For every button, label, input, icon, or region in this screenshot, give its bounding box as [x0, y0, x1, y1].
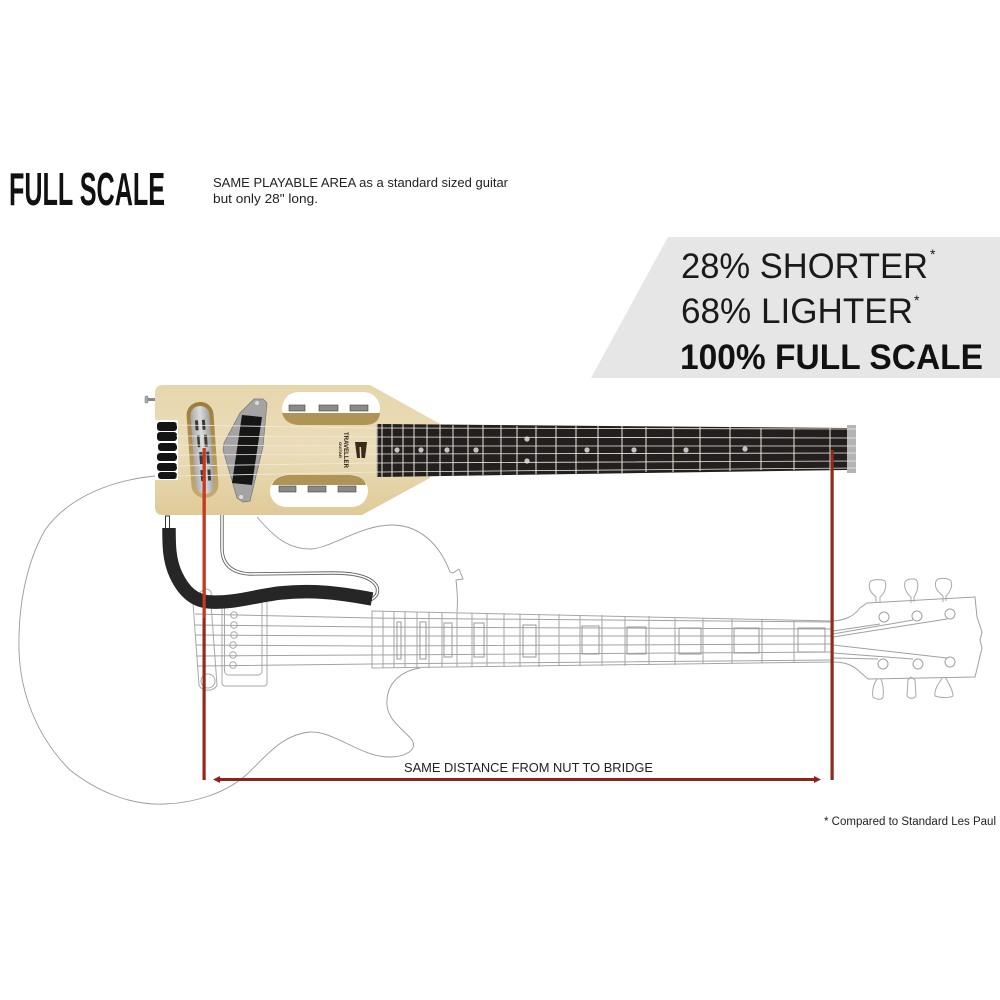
- stat: 68% lighter: 68% LIGHTER: [681, 292, 913, 331]
- tuner knobs: [869, 578, 953, 699]
- headstock: [833, 597, 982, 679]
- logo: [338, 432, 367, 468]
- lower tuner cutout: [270, 475, 368, 507]
- standard guitar outline: [19, 476, 982, 804]
- stat: 28% shorter: 28% SHORTER: [681, 247, 928, 286]
- nut: [847, 425, 856, 473]
- body outline: [19, 476, 463, 804]
- stat: 100% full scale: 100% FULL SCALE: [680, 338, 983, 377]
- fretboard: [372, 611, 832, 668]
- humbucker pickup: [222, 600, 267, 686]
- wire rest: [222, 515, 378, 600]
- subtitle text block: but only 28" long.: [213, 192, 318, 206]
- distance label: SAME DISTANCE FROM NUT TO BRIDGE: [404, 760, 653, 775]
- fretboard: [377, 424, 847, 477]
- fret inlays: [397, 622, 825, 659]
- black padded rest: [169, 528, 372, 602]
- bridge marker line: [202, 448, 206, 780]
- upper tuner cutout: [282, 392, 380, 425]
- logo: TRAVELLER: [342, 432, 349, 468]
- double arrow: [213, 776, 821, 783]
- nut marker line: [830, 450, 834, 780]
- neck pickup: [223, 399, 267, 502]
- strap button: [145, 396, 155, 403]
- footnote: * Compared to Standard Les Paul: [824, 816, 996, 828]
- tailpiece: [193, 589, 217, 690]
- stat: 28% shorter: *: [930, 246, 936, 262]
- stat: 68% lighter: *: [914, 292, 920, 308]
- bridge pickup: [186, 401, 219, 499]
- strings: [176, 425, 856, 476]
- travel guitar: [145, 385, 856, 602]
- subtitle text block: [213, 176, 508, 206]
- subtitle text block: SAME PLAYABLE AREA as a standard sized guitar: [213, 176, 508, 190]
- panel: comparison stats banner: [591, 237, 1000, 378]
- title: FULL SCALE: [9, 163, 165, 215]
- guitar body: [155, 385, 442, 515]
- folding rest post: [166, 516, 170, 529]
- frets: [377, 424, 830, 477]
- strings: [195, 614, 833, 666]
- logo: GUITAR: [338, 442, 342, 459]
- measurement lines: [202, 448, 834, 783]
- string lock: [155, 420, 178, 480]
- fret dots: [394, 436, 748, 464]
